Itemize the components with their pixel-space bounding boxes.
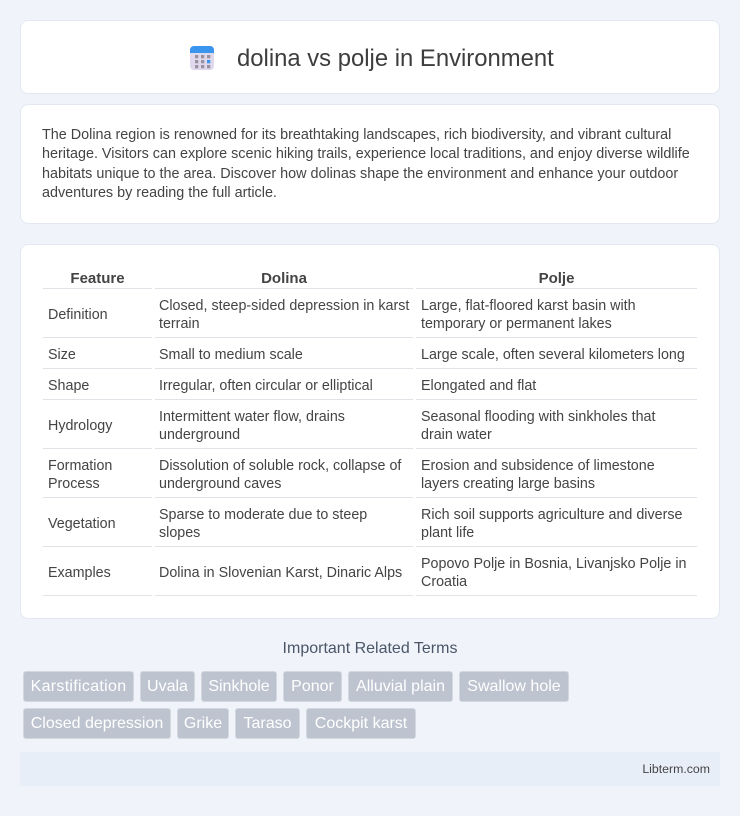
comparison table panel: Large scale, often several kilometers long xyxy=(421,347,685,363)
intro paragraph: adventures by reading the full article. xyxy=(42,185,277,201)
comparison table panel: underground caves xyxy=(159,476,281,492)
header panel xyxy=(20,20,720,94)
comparison table panel: drain water xyxy=(421,427,492,443)
comparison table panel: Rich soil supports agriculture and diverse xyxy=(421,507,682,523)
comparison table panel: terrain xyxy=(159,316,200,332)
tag: Uvala xyxy=(140,671,195,702)
tag: Cockpit karst xyxy=(306,708,416,739)
comparison table panel: Dissolution of soluble rock, collapse of xyxy=(159,458,401,474)
row: Definition: Definition xyxy=(48,307,108,323)
comparison table panel: underground xyxy=(159,427,240,443)
tag: Cockpit karst: Cockpit karst xyxy=(315,715,407,732)
tag: Sinkhole: Sinkhole xyxy=(208,678,270,695)
tag: Taraso xyxy=(235,708,300,739)
comparison table panel: Croatia xyxy=(421,574,467,590)
tag: Uvala: Uvala xyxy=(147,678,188,695)
tag: Swallow hole: Swallow hole xyxy=(467,678,561,695)
tag: Taraso: Taraso xyxy=(243,715,292,732)
comparison table panel: slopes xyxy=(159,525,200,541)
icon: calendar app xyxy=(190,46,214,70)
tag: Sinkhole xyxy=(201,671,277,702)
row: Formation Process xyxy=(48,458,112,492)
comparison table panel: temporary or permanent lakes xyxy=(421,316,612,332)
tag: Closed depression xyxy=(23,708,171,739)
tag: Grike xyxy=(177,708,229,739)
tag: Swallow hole xyxy=(459,671,569,702)
tag: Alluvial plain xyxy=(348,671,453,702)
comparison table panel: Small to medium scale xyxy=(159,347,303,363)
tag: Grike: Grike xyxy=(184,715,222,732)
table header: Dolina: Dolina xyxy=(261,270,307,287)
comparison table panel: Closed, steep-sided depression in karst xyxy=(159,298,409,314)
comparison table panel: Sparse to moderate due to steep xyxy=(159,507,367,523)
tag: Ponor xyxy=(283,671,342,702)
row: Formation Process: Formation xyxy=(48,458,112,474)
tag: Karstification: Karstification xyxy=(31,678,126,695)
comparison table panel: Erosion and subsidence of limestone xyxy=(421,458,655,474)
row: Shape: Shape xyxy=(48,378,89,394)
footer bar xyxy=(20,752,720,786)
comparison table panel: Intermittent water flow, drains xyxy=(159,409,345,425)
comparison table panel: Irregular, often circular or elliptical xyxy=(159,378,373,394)
tag: Alluvial plain: Alluvial plain xyxy=(356,678,445,695)
intro paragraph: The Dolina region is renowned for its breathtaking landscapes, rich biodiversity, and vibrant cultural xyxy=(42,127,671,143)
footer credit: Libterm.com xyxy=(642,762,710,776)
comparison table panel: Seasonal flooding with sinkholes that xyxy=(421,409,655,425)
table header: Feature: Feature xyxy=(70,270,125,287)
comparison table panel: Popovo Polje in Bosnia, Livanjsko Polje in xyxy=(421,556,686,572)
intro paragraph: habitats unique to the area. Discover how dolinas shape the environment and enhance your outdoor xyxy=(42,166,678,182)
row: Vegetation: Vegetation xyxy=(48,516,116,532)
tag: Ponor: Ponor xyxy=(291,678,334,695)
comparison table panel: plant life xyxy=(421,525,474,541)
tag: Karstification xyxy=(23,671,134,702)
intro text panel xyxy=(20,104,720,224)
comparison table panel xyxy=(20,244,720,619)
row: Hydrology: Hydrology xyxy=(48,418,112,434)
row: Examples: Examples xyxy=(48,565,111,581)
intro paragraph xyxy=(42,127,690,201)
table header: Polje: Polje xyxy=(539,270,574,287)
tag: Closed depression: Closed depression xyxy=(31,715,163,732)
comparison table panel: Elongated and flat xyxy=(421,378,536,394)
row: Formation Process: Process xyxy=(48,476,100,492)
comparison table panel: Dolina in Slovenian Karst, Dinaric Alps xyxy=(159,565,402,581)
intro paragraph: heritage. Visitors can explore scenic hiking trails, experience local traditions, and enjoy diverse wildlife xyxy=(42,146,690,162)
related terms heading: Important Related Terms xyxy=(283,640,457,657)
row: Size: Size xyxy=(48,347,76,363)
title: dolina vs polje in Environment xyxy=(237,45,554,72)
comparison table panel: Large, flat-floored karst basin with xyxy=(421,298,636,314)
comparison table panel: layers creating large basins xyxy=(421,476,595,492)
